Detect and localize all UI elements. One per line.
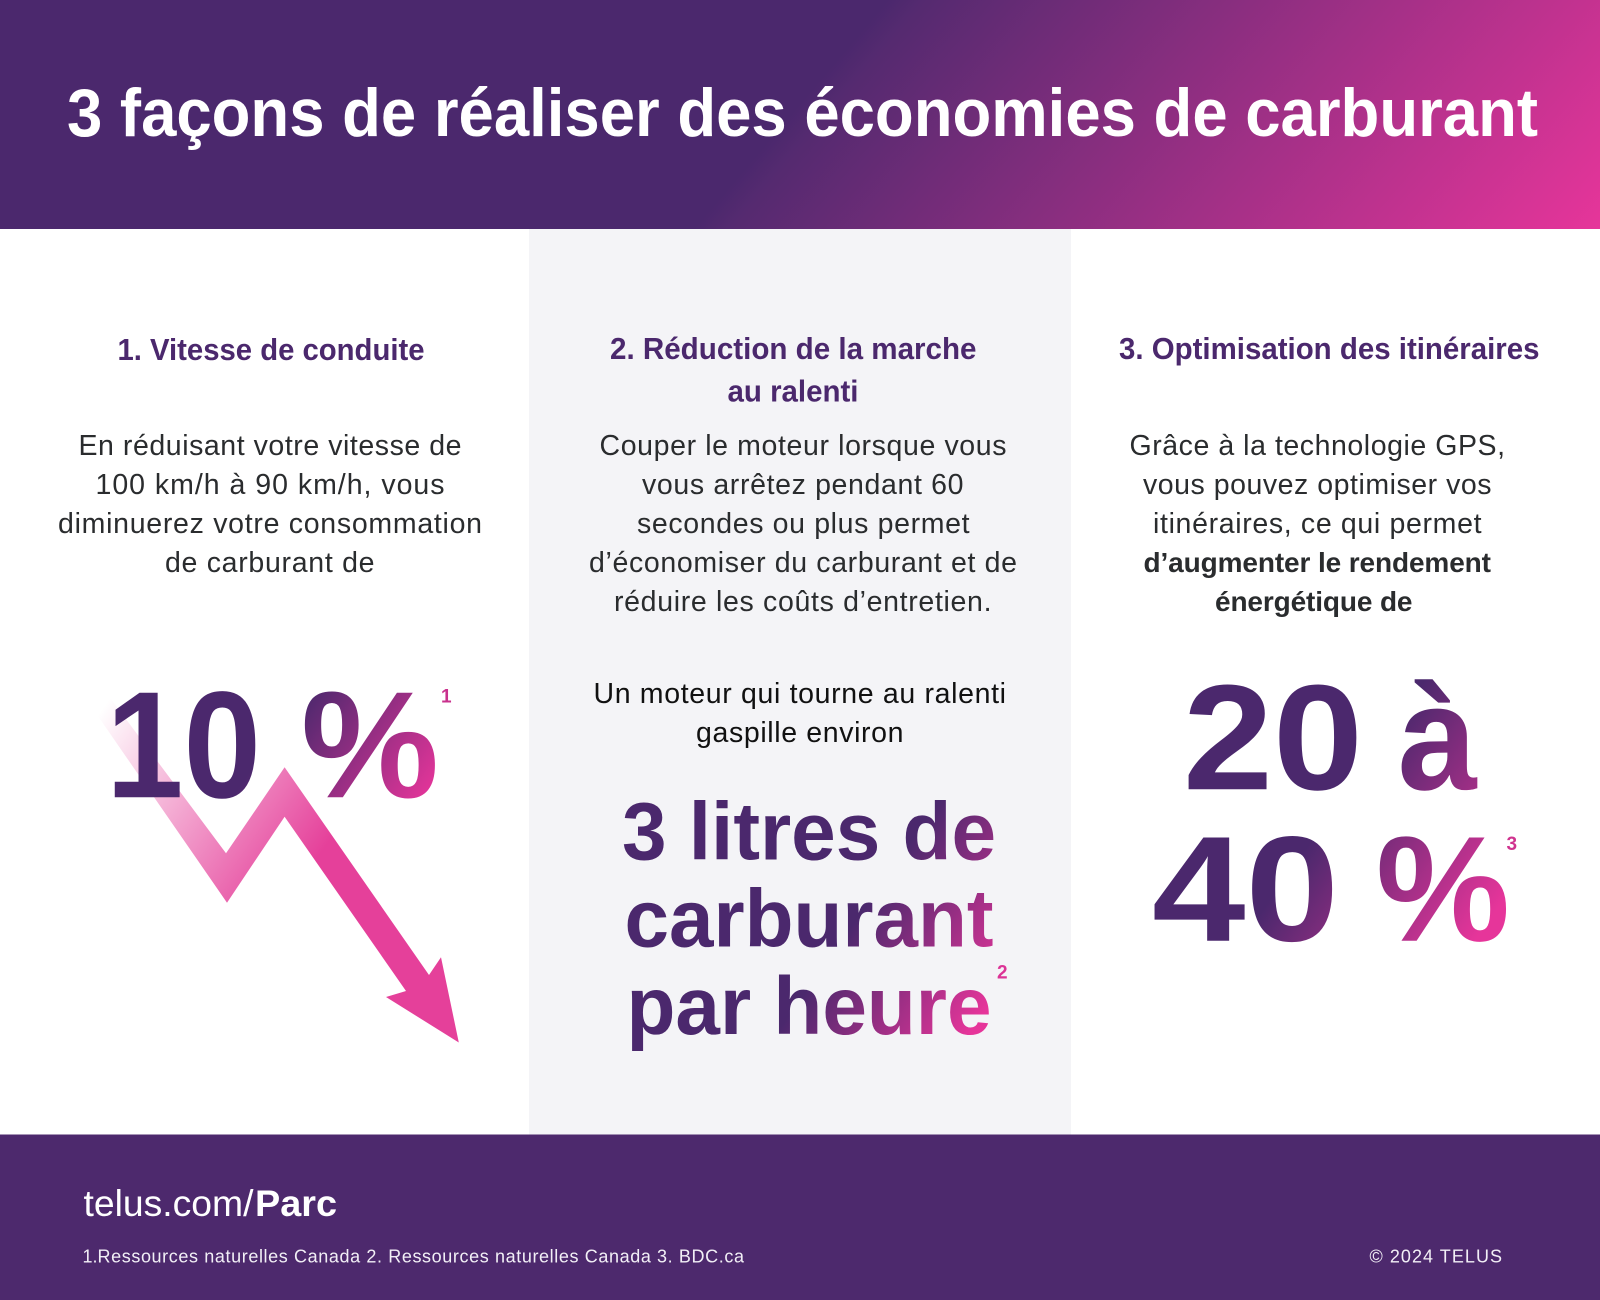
body text 2: réduire les coûts d’entretien. xyxy=(614,586,992,618)
footer band xyxy=(0,1134,1600,1300)
statistic: 3 litres de carburant par heure: par heure xyxy=(626,961,992,1052)
copyright: © 2024 TELUS xyxy=(1370,1246,1502,1266)
footer link xyxy=(84,1183,337,1224)
statistic: 3 litres de carburant par heure: 3 litres de xyxy=(622,786,996,877)
panel: column 1, driving speed xyxy=(58,332,482,1042)
statistic: 20 à 40 %: 40 xyxy=(1152,805,1339,973)
statistic: 3 litres de carburant par heure: carburant xyxy=(624,874,994,965)
body text 3: d’augmenter le rendement xyxy=(1144,547,1491,578)
body text 2: Couper le moteur lorsque vous xyxy=(600,430,1006,462)
body text 1: de carburant de xyxy=(165,547,374,579)
title: 3 façons de réaliser des économies de carburant xyxy=(67,75,1538,151)
panel: column 3, route optimisation xyxy=(1119,331,1540,973)
body text 3 xyxy=(1130,430,1505,617)
heading 2: 2. Réduction de la marche xyxy=(610,331,976,366)
heading 3: 3. Optimisation des itinéraires xyxy=(1119,331,1540,366)
lead-in text: gaspille environ xyxy=(696,717,904,749)
statistic: 20 à 40 %: 20 xyxy=(1183,653,1363,821)
body text 1: diminuerez votre consommation xyxy=(58,508,482,540)
heading 2 xyxy=(610,331,976,409)
footer link: Parc xyxy=(255,1183,337,1224)
sources: Ressources naturelles Canada 2. Ressources naturelles Canada 3. BDC.ca xyxy=(98,1246,745,1266)
panel: column 2, idling reduction xyxy=(589,331,1017,1052)
statistic: 10 %: % xyxy=(301,660,439,830)
body text 2: secondes ou plus permet xyxy=(637,508,970,540)
header banner xyxy=(0,0,1600,229)
body text 1: 100 km/h à 90 km/h, vous xyxy=(96,469,444,501)
statistic: 20 à 40 %: % xyxy=(1376,805,1510,973)
lead-in text xyxy=(594,678,1006,749)
footnote marker 3: 3 xyxy=(1506,834,1517,855)
statistic: 3 litres de carburant par heure xyxy=(622,786,996,1052)
body text 3: itinéraires, ce qui permet xyxy=(1153,508,1482,540)
panel: centre column background xyxy=(529,229,1071,1135)
heading 2: au ralenti xyxy=(728,374,858,409)
body text 3: vous pouvez optimiser vos xyxy=(1143,469,1492,501)
statistic: 10 %: 10 xyxy=(106,660,261,830)
lead-in text: Un moteur qui tourne au ralenti xyxy=(594,678,1006,710)
footer link: telus.com/ xyxy=(84,1183,254,1224)
body text 3: énergétique de xyxy=(1215,586,1412,617)
sources: 1. xyxy=(82,1246,98,1266)
body text 3: Grâce à la technologie GPS, xyxy=(1130,430,1505,462)
body text 1: En réduisant votre vitesse de xyxy=(78,430,462,462)
icon: falling zigzag arrow xyxy=(96,695,459,1042)
body text 2: vous arrêtez pendant 60 xyxy=(642,469,964,501)
body text 1 xyxy=(58,430,482,579)
footnote marker 2: 2 xyxy=(997,962,1008,983)
body text 2 xyxy=(589,430,1017,618)
statistic: 20 à 40 % xyxy=(1152,653,1510,973)
body text 2: d’économiser du carburant et de xyxy=(589,547,1017,579)
footnote marker 1: 1 xyxy=(441,687,452,708)
heading 1: 1. Vitesse de conduite xyxy=(118,332,424,367)
statistic: 10 % xyxy=(106,660,439,830)
statistic: 20 à 40 %: à xyxy=(1398,653,1478,821)
